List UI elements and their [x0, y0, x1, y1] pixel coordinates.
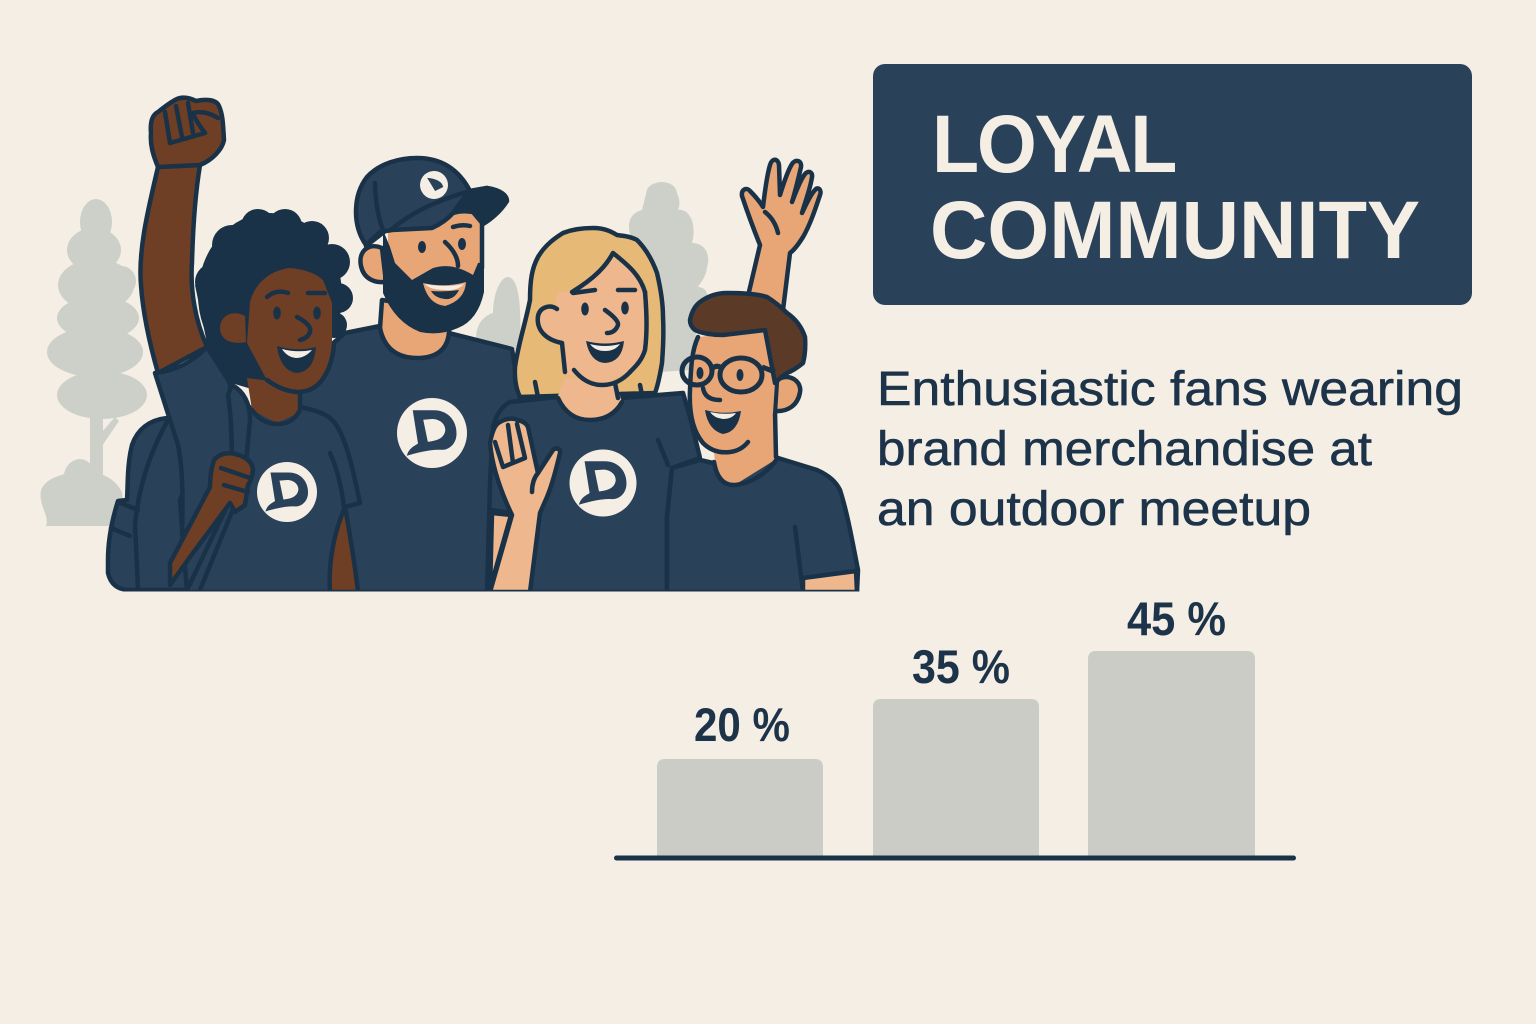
raised arm	[140, 165, 207, 373]
glasses	[682, 357, 775, 392]
underarm	[490, 513, 511, 592]
sleeve	[155, 347, 232, 535]
ear	[220, 313, 246, 343]
cap	[356, 158, 487, 245]
waving hand and arm	[490, 419, 560, 592]
shirt logo	[257, 462, 317, 522]
hair	[195, 209, 353, 392]
description text: brand merchandise at	[877, 423, 1372, 476]
bar chart	[614, 592, 1296, 860]
right forearm	[330, 507, 358, 592]
bush: left	[41, 459, 123, 526]
gap behind neck	[702, 448, 714, 458]
tree: right	[629, 182, 708, 372]
description text: Enthusiastic fans wearing	[877, 363, 1463, 416]
ear	[775, 377, 800, 411]
description text	[877, 363, 1463, 536]
face	[247, 268, 332, 392]
face	[555, 253, 645, 385]
axis line	[614, 856, 1296, 860]
tree: small centre	[476, 277, 520, 350]
tree: tall left	[47, 199, 147, 478]
mouth	[423, 282, 466, 306]
cap brim	[453, 188, 507, 224]
value labels: 35 %	[912, 640, 1010, 693]
figure: man with glasses	[667, 293, 858, 592]
bar: 35 %	[873, 699, 1039, 856]
fist	[151, 98, 224, 167]
description text: an outdoor meetup	[877, 483, 1311, 536]
mouth	[277, 346, 316, 373]
shirt seam	[658, 440, 668, 465]
figure: blonde woman	[487, 228, 700, 592]
facial details	[581, 302, 589, 316]
torso	[300, 326, 520, 592]
face	[388, 205, 482, 292]
eyes and nose	[418, 241, 426, 253]
facial details	[273, 306, 281, 320]
strap gap	[231, 378, 246, 392]
neck	[247, 378, 300, 423]
figure: man raised arm and hand	[742, 160, 821, 310]
title banner	[873, 64, 1472, 305]
ear	[538, 307, 565, 372]
torso	[487, 393, 700, 592]
hair	[690, 293, 805, 383]
neck	[713, 405, 778, 486]
face	[690, 330, 775, 452]
backpack	[108, 418, 200, 590]
neck	[380, 300, 449, 358]
mouth	[705, 410, 741, 434]
hand on strap	[170, 453, 253, 585]
torso	[667, 458, 858, 592]
torso	[180, 383, 360, 592]
value labels: 45 %	[1127, 592, 1226, 645]
cap logo	[416, 167, 452, 203]
eyes and nose	[696, 367, 704, 379]
neck	[557, 378, 622, 420]
shirt logo	[570, 450, 636, 516]
bar: 20 %	[657, 759, 823, 856]
title banner: COMMUNITY	[930, 185, 1420, 276]
backpack strap	[228, 385, 250, 465]
bar: 45 %	[1088, 651, 1255, 856]
ear	[360, 246, 386, 282]
beard	[383, 230, 484, 333]
background trees	[41, 182, 708, 526]
shirt logo	[397, 398, 467, 468]
value labels: 20 %	[694, 698, 790, 751]
lower arm	[803, 571, 857, 592]
title text: LOYAL	[932, 98, 1177, 190]
figure: woman with raised fist and backpack	[108, 98, 360, 592]
figure: bearded man in cap	[300, 158, 520, 592]
value labels	[694, 592, 1226, 751]
hair	[515, 228, 663, 397]
mouth	[586, 341, 624, 363]
